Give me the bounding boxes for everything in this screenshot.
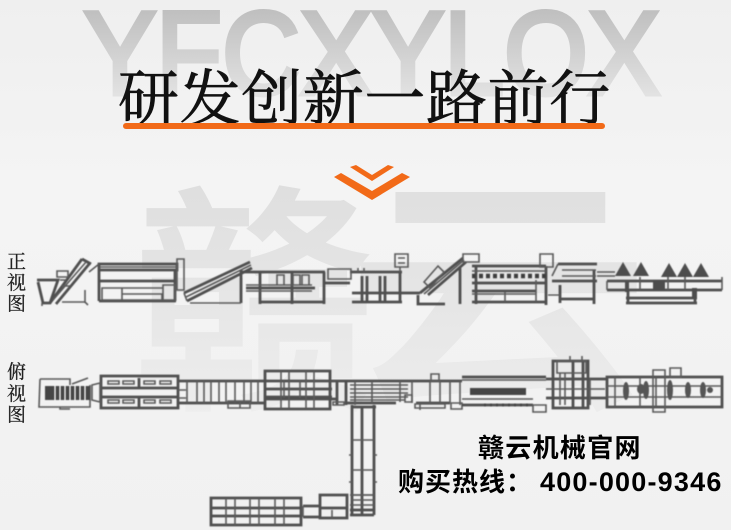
front machine 1: hopper and elevator xyxy=(37,259,91,306)
label: top view: 图 xyxy=(7,404,26,426)
top machine 3: sorting tables xyxy=(265,371,337,409)
top machine 6: long washer xyxy=(462,377,546,412)
top view production line xyxy=(39,356,722,525)
watermark: 赣: 赣 xyxy=(134,173,374,441)
front machine 5: dryers and control box xyxy=(324,254,408,303)
label: front view: 图 xyxy=(7,293,26,315)
front machine 2: washer xyxy=(89,259,184,301)
front view production line xyxy=(37,254,722,306)
hotline text: 400-000-9346 xyxy=(540,467,723,497)
label: top view: 俯 xyxy=(7,361,26,383)
label: front view: 正 xyxy=(7,251,26,273)
label: front view: 视 xyxy=(7,272,26,294)
top machine 2: washer xyxy=(92,376,178,408)
bottom machine: connector xyxy=(303,495,374,518)
front machine 4: table line xyxy=(240,272,325,304)
front machine 9: fans and air dryer xyxy=(607,262,722,303)
front machine 7: long washer xyxy=(472,254,553,305)
front machine 8: blancher xyxy=(548,264,615,304)
front machine 6: elevator xyxy=(402,254,479,304)
title: 研发创新一路前行 xyxy=(118,67,611,134)
company website text: 赣云机械官网 xyxy=(478,433,642,463)
icon: double chevron xyxy=(334,165,410,200)
top machine 5: linking unit xyxy=(410,374,462,410)
top machine 8: air dryer xyxy=(607,368,722,412)
watermark: 云: 云 xyxy=(346,163,651,442)
label: top view: 视 xyxy=(7,383,26,405)
bottom machine: outfeed tables xyxy=(211,498,301,525)
top machine 7: blancher xyxy=(546,356,608,408)
top machine 4: dense conveyor xyxy=(333,381,412,405)
vertical conveyor xyxy=(349,405,377,515)
title underline xyxy=(123,123,605,129)
front machine 3: incline conveyor xyxy=(184,262,252,303)
top machine 1: feeder xyxy=(39,378,90,409)
top conveyor xyxy=(178,381,265,408)
hotline text: 购买热线： xyxy=(398,467,533,497)
